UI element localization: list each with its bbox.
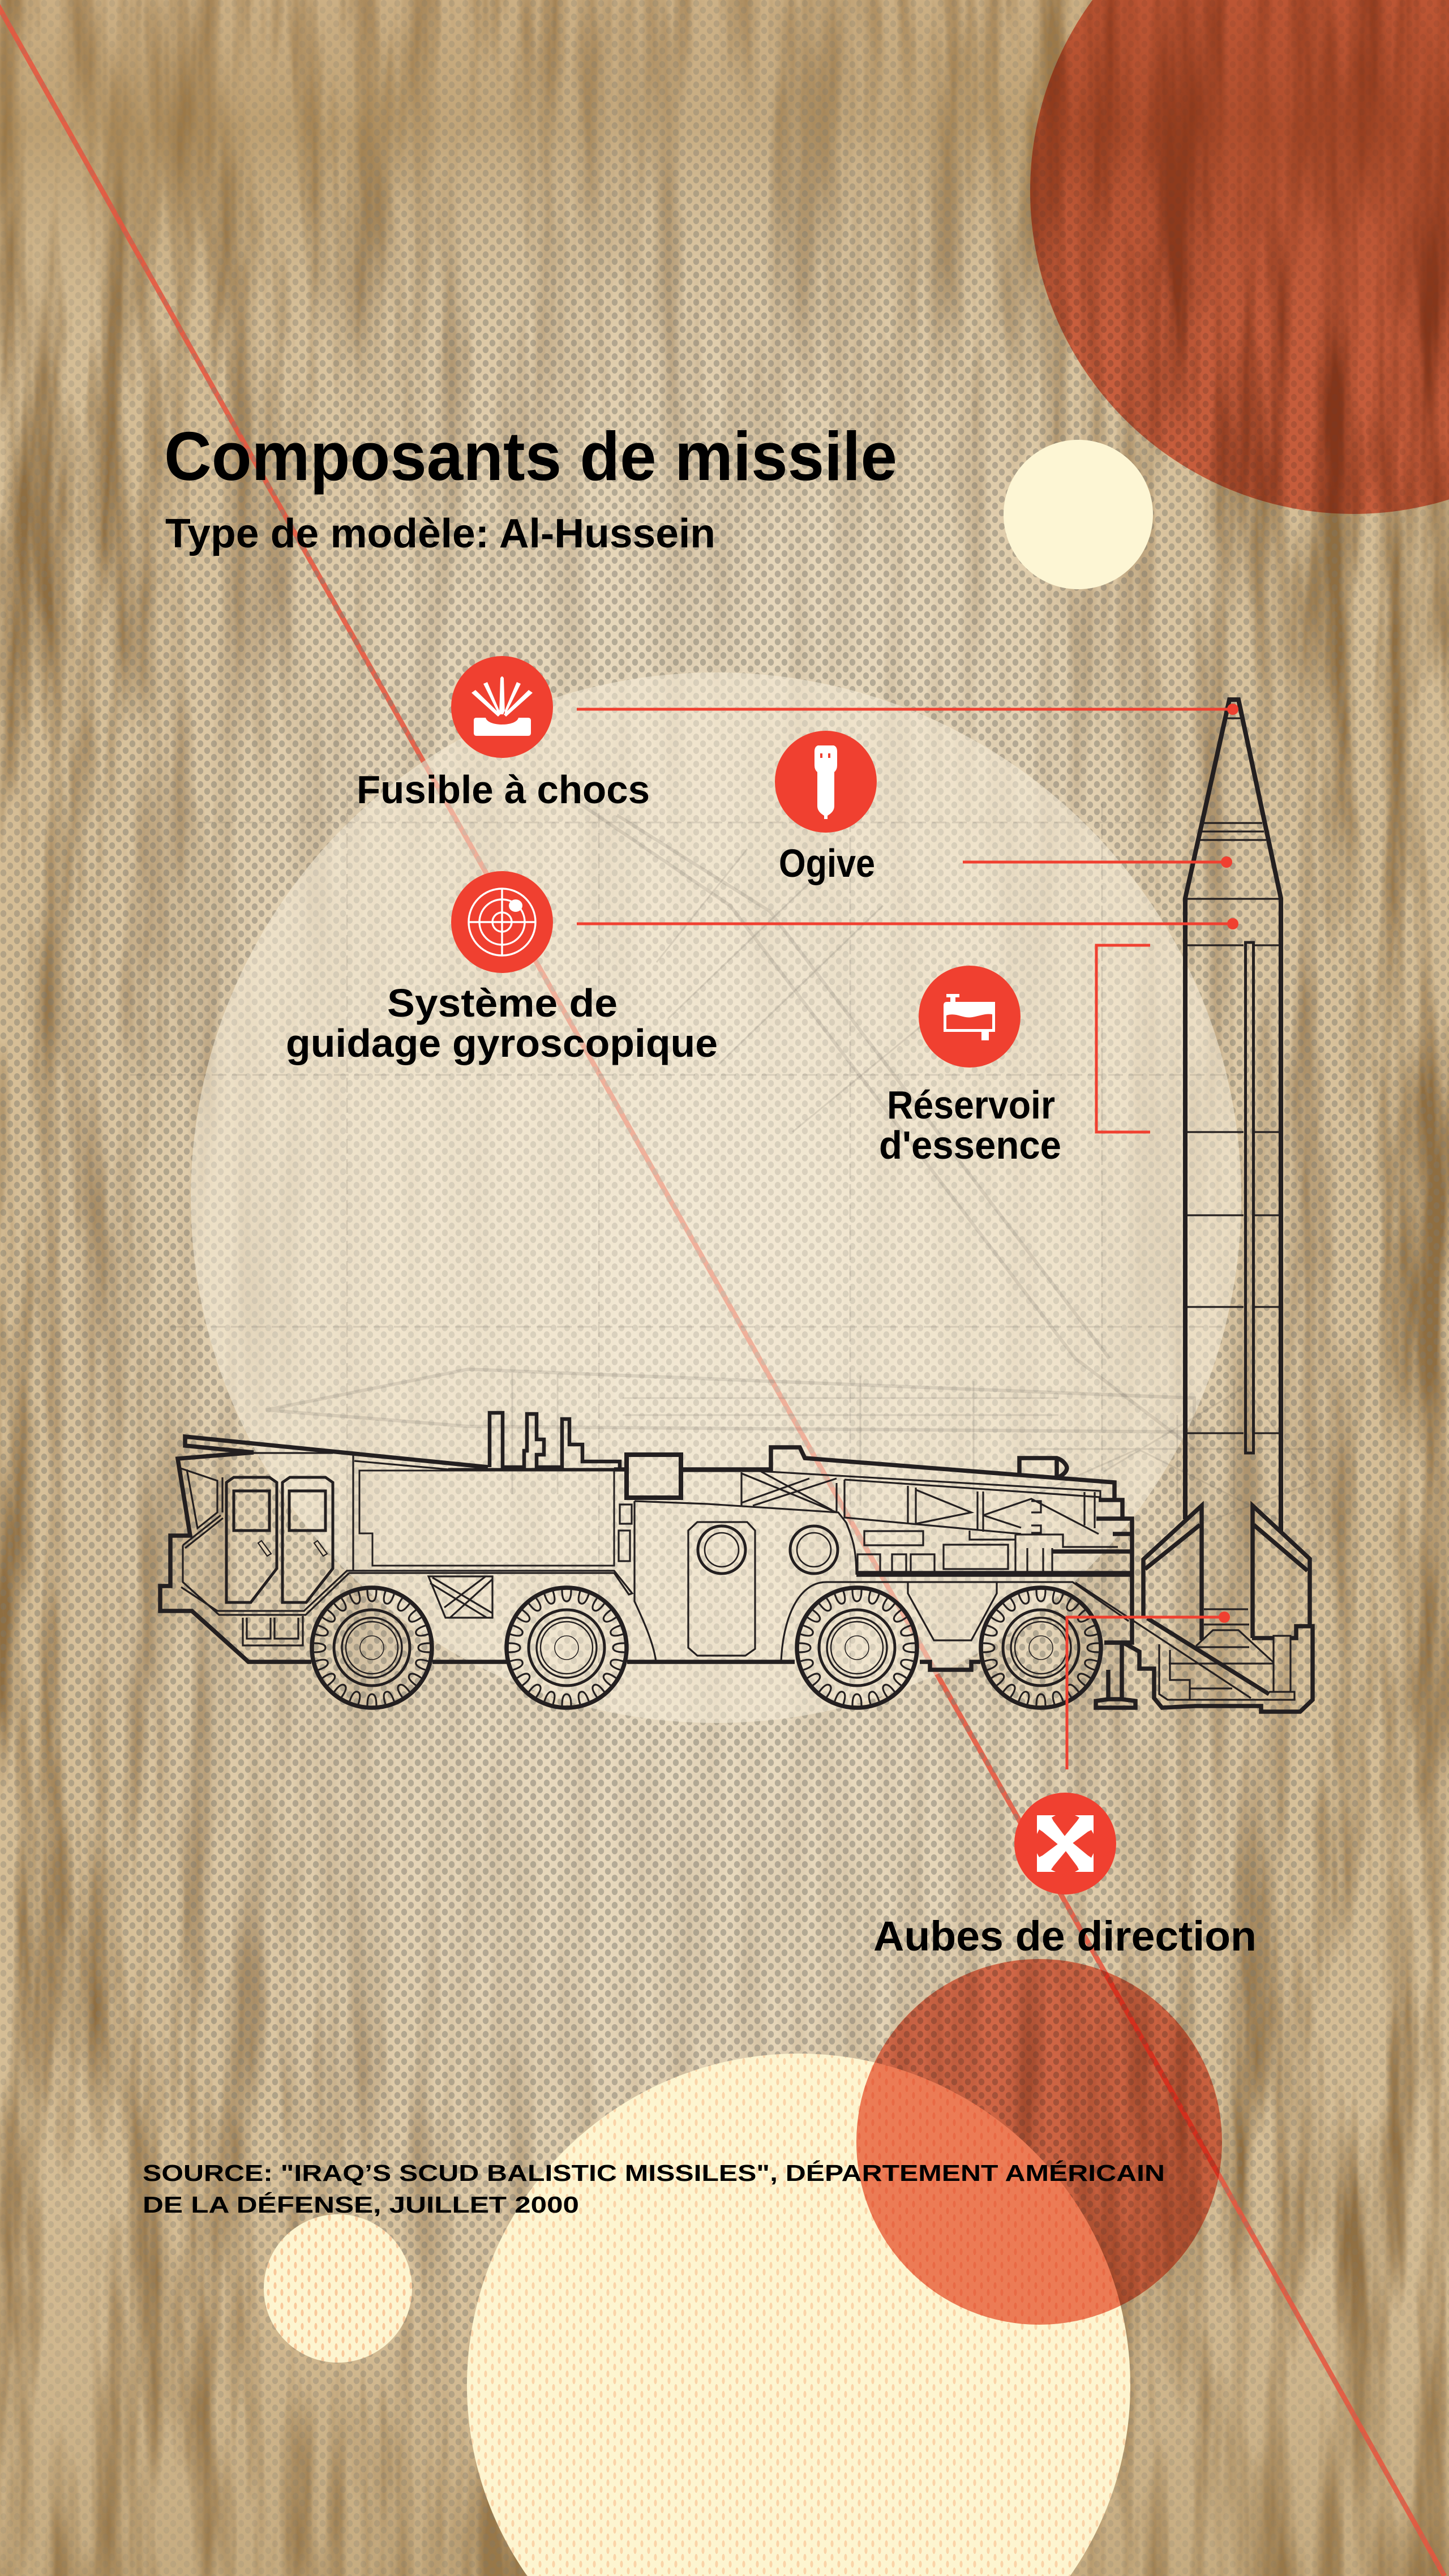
cab details (181, 1453, 632, 1615)
leader line and dot (577, 704, 1238, 715)
label (286, 981, 718, 1065)
left fin (1143, 1506, 1202, 1640)
subtitle: Type de modèle: Al-Hussein (165, 511, 715, 556)
launcher base cradle (1075, 1583, 1313, 1712)
top mounts (1019, 1458, 1067, 1477)
title: Composants de missile (164, 418, 897, 495)
label: Aubes de direction (873, 1913, 1257, 1960)
ghost blueprint sketch behind the truck (130, 736, 1324, 1698)
label: Fusible à chocs (357, 768, 650, 812)
large cream circle bottom (467, 2054, 1130, 2576)
jack stand (1096, 1643, 1135, 1708)
doors (226, 1477, 333, 1602)
icon: shock fuse (451, 656, 553, 758)
callout: aubes de direction (873, 1611, 1257, 1960)
callout: réservoir d'essence (879, 945, 1150, 1167)
red circle top right (1030, 0, 1449, 514)
central box (627, 1455, 681, 1498)
body round hatches (698, 1526, 838, 1574)
label: Système de (387, 981, 618, 1025)
source note: DE LA DÉFENSE, JUILLET 2000 (143, 2192, 579, 2218)
large pale background circle (191, 672, 1241, 1723)
source note: SOURCE: "IRAQ’S SCUD BALISTIC MISSILES", DÉPARTEMENT AMÉRICAIN (143, 2160, 1165, 2186)
right fin (1253, 1506, 1310, 1638)
bracket (1096, 945, 1150, 1132)
leader line and dot (963, 856, 1232, 868)
exhaust stacks (490, 1413, 620, 1469)
launcher truss (681, 1471, 1100, 1534)
wheel arches (781, 1582, 1129, 1662)
leader line and dot (577, 918, 1238, 929)
missile side tube (1245, 942, 1253, 1453)
stepped rear frame (856, 1500, 1132, 1643)
source note (143, 2160, 1165, 2218)
equipment boxes (856, 1531, 1132, 1575)
small cream circle top (1004, 440, 1153, 589)
icon: crossed arrows (1014, 1793, 1116, 1895)
callout: ogive (775, 731, 1232, 885)
door handles (258, 1541, 327, 1556)
radiator grille (243, 1616, 303, 1645)
missile nose cone and body walls (1185, 700, 1281, 1531)
cross panel (428, 1576, 492, 1618)
label: d'essence (879, 1123, 1061, 1167)
missile (1143, 700, 1310, 1640)
red circle bottom (856, 1959, 1222, 2325)
wheels (312, 1588, 1101, 1708)
cargo panel (359, 1471, 614, 1566)
leader line and dot (1067, 1611, 1230, 1769)
label (879, 1083, 1061, 1167)
boom and cab outline (160, 1437, 980, 1670)
truck cab and body (160, 1413, 1132, 1670)
missile section lines (1188, 718, 1279, 1433)
body panels (619, 1501, 856, 1662)
label: Réservoir (887, 1083, 1055, 1127)
icon: fuel tank (919, 966, 1021, 1068)
callout: fusible à chocs (357, 656, 1238, 812)
label: Ogive (779, 841, 875, 885)
label: guidage gyroscopique (286, 1021, 718, 1065)
small cream circle bottom (264, 2214, 412, 2363)
icon: warhead (775, 731, 877, 833)
icon: radar target (451, 871, 553, 973)
callout: système de guidage gyroscopique (286, 871, 1238, 1065)
